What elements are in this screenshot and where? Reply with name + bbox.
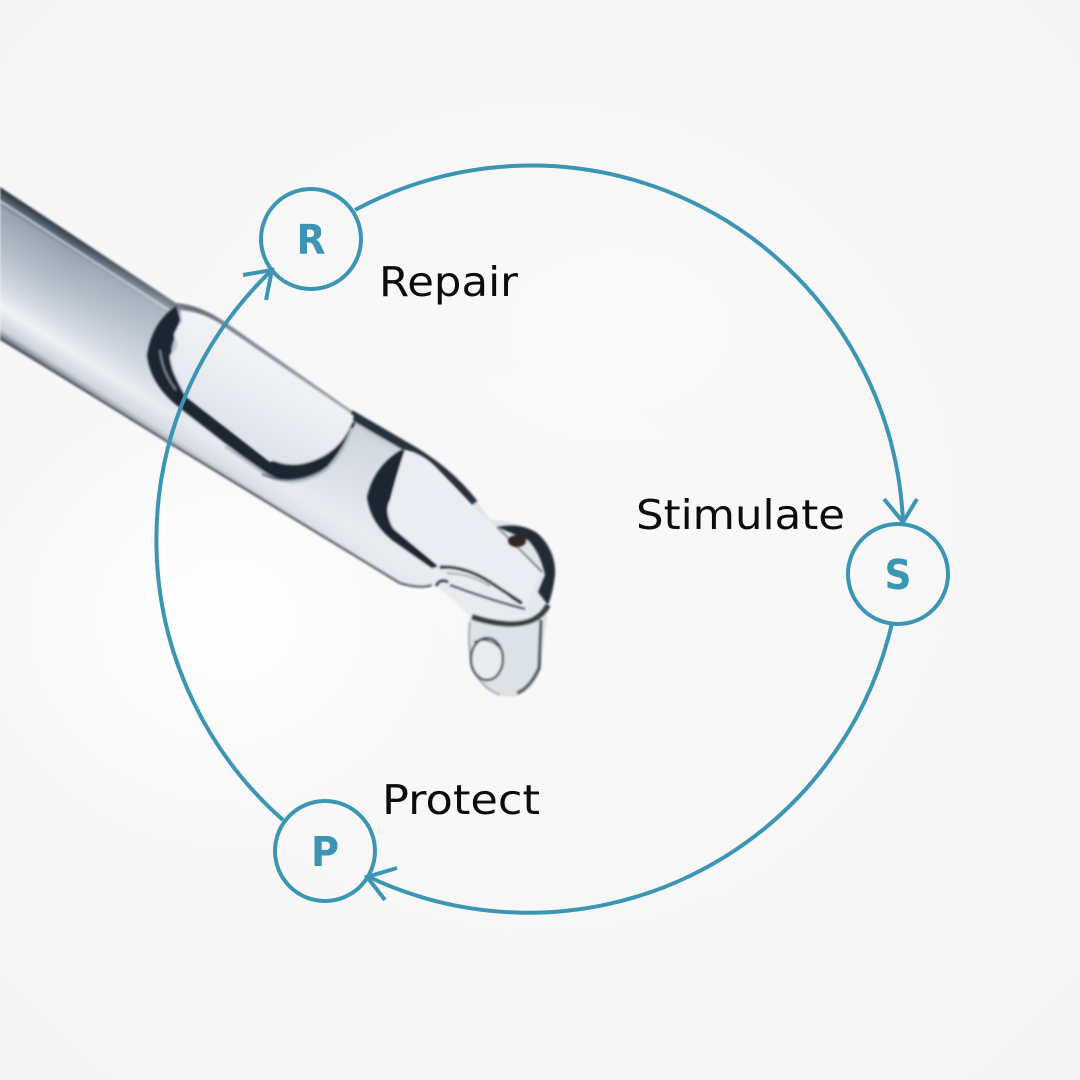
node R: R <box>296 216 326 264</box>
lower liquid column near tip <box>367 449 542 609</box>
node S: S <box>884 551 912 599</box>
pipette silhouette and glass tube <box>0 187 554 696</box>
pipette tip <box>497 525 555 605</box>
node S <box>848 524 948 624</box>
label: Protect: Protect <box>382 776 540 824</box>
arrowhead at stimulate <box>884 499 917 522</box>
node P <box>275 801 375 901</box>
arrowhead at protect <box>367 868 397 900</box>
photo: glass pipette with drop <box>0 187 555 696</box>
label: Stimulate: Stimulate <box>636 491 845 539</box>
node P: P <box>311 828 339 876</box>
upper liquid column with dark meniscus <box>147 306 356 481</box>
node R <box>261 189 361 289</box>
arc: stimulate to protect <box>367 623 892 913</box>
arc: repair to stimulate <box>355 166 903 522</box>
arrowhead at repair <box>243 270 272 300</box>
label: Repair: Repair <box>379 258 518 306</box>
arc: protect to repair <box>156 270 283 820</box>
hanging drop <box>469 605 548 696</box>
cycle ring with arrows <box>156 166 917 913</box>
